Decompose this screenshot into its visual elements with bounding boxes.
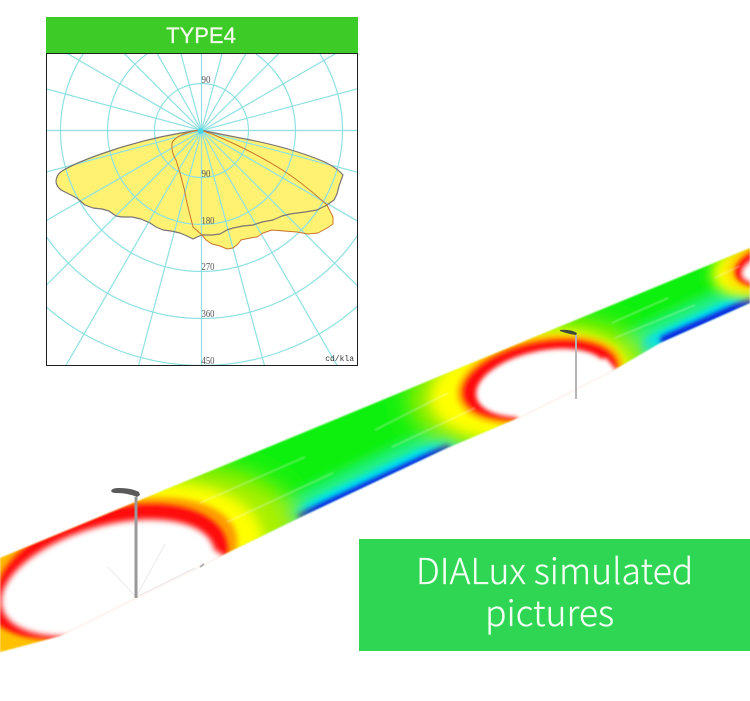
axis labels: 180 — [202, 216, 214, 227]
axis labels: 270 — [202, 262, 214, 273]
cyan and blue falloff along the road edge — [262, 298, 750, 538]
road illuminance heatmap — [0, 247, 750, 653]
distribution curve outlines — [56, 130, 343, 249]
chart title bar: TYPE4 — [166, 23, 236, 48]
light distribution shape — [56, 130, 343, 249]
pale streaks on the road — [200, 266, 740, 522]
centre point — [198, 128, 204, 134]
lamp pool: left — [27, 451, 320, 640]
axis labels: 90 — [202, 169, 210, 180]
axis labels: 360 — [202, 309, 214, 320]
caption panel: DIALux simulated — [416, 544, 693, 595]
lamp pool: middle — [399, 301, 661, 469]
axis labels: 90 — [202, 75, 210, 86]
polar chart panel — [46, 53, 358, 366]
lamp pool: right — [698, 247, 750, 310]
axis labels — [202, 75, 214, 367]
caption panel — [359, 539, 750, 651]
chart title bar — [46, 17, 358, 53]
lamp post: left — [108, 488, 204, 598]
unit label: cd/kla — [325, 355, 354, 364]
axis labels: 450 — [202, 356, 214, 367]
caption panel: pictures — [485, 586, 614, 637]
polar grid — [47, 54, 357, 365]
lamp post: middle — [560, 330, 577, 399]
